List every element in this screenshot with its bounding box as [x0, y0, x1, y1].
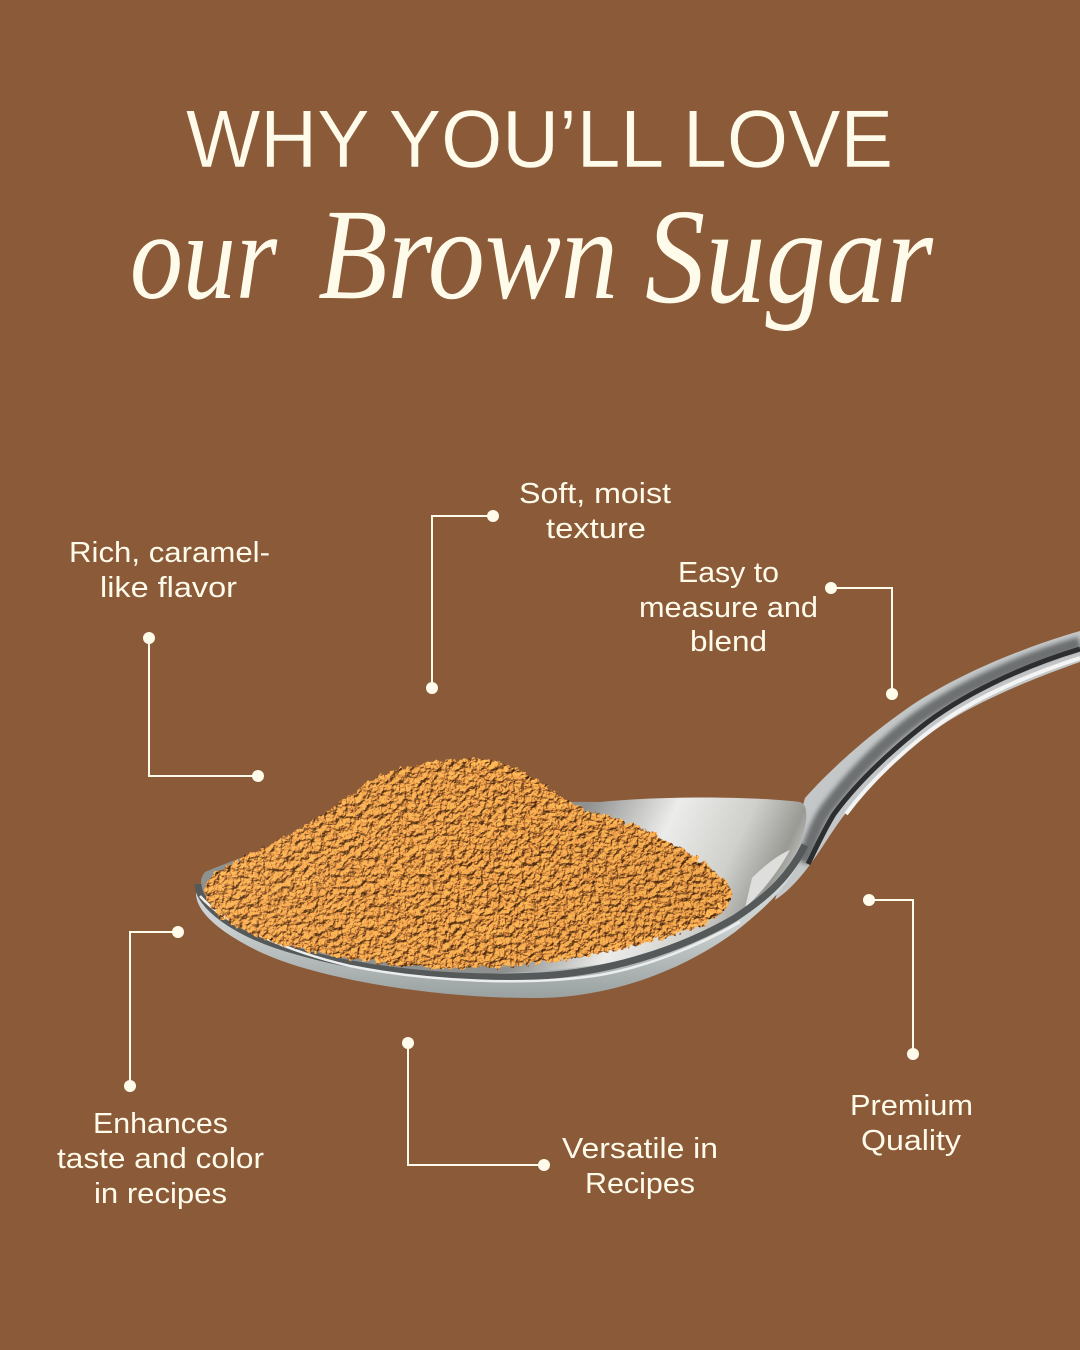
- heading: why you'll love: WHY YOU’LL LOVE: [186, 94, 893, 185]
- callout: soft, moist texture: texture: [546, 513, 646, 545]
- heading: our brown sugar: Sugar: [645, 182, 934, 332]
- spoon rim highlight: [200, 896, 740, 981]
- brown sugar pile: [205, 759, 734, 968]
- callout: soft, moist texture: Soft, moist: [519, 478, 671, 510]
- callout: easy to measure and blend: blend: [690, 626, 767, 658]
- spoon bowl interior: [201, 798, 806, 974]
- handle dark reflection: [808, 649, 1080, 864]
- callout: enhances taste and color in recipes: [57, 926, 264, 1210]
- callout: enhances taste and color in recipes: taste and color: [57, 1143, 264, 1175]
- callout: versatile in recipes: [402, 1037, 718, 1200]
- callout: enhances taste and color in recipes: Enhances: [93, 1108, 228, 1140]
- callout: rich, caramel-like flavor: like flavor: [100, 572, 237, 604]
- heading: our brown sugar: our: [130, 188, 278, 325]
- callout: versatile in recipes: Versatile in: [562, 1133, 718, 1165]
- spoon underside: [196, 860, 800, 998]
- handle lower highlight: [846, 658, 1080, 814]
- callout: easy to measure and blend: [639, 557, 898, 700]
- title: [130, 94, 934, 332]
- callout: enhances taste and color in recipes: in recipes: [94, 1178, 227, 1210]
- spoon bowl highlight: [745, 850, 790, 908]
- spoon handle: [775, 631, 1080, 900]
- spoon rim: [198, 845, 805, 977]
- callout: premium quality: Premium: [850, 1090, 973, 1122]
- sugar shading: [209, 762, 730, 966]
- spoon with brown sugar: [196, 631, 1080, 998]
- heading: our brown sugar: [130, 182, 934, 332]
- callout: premium quality: [850, 894, 973, 1157]
- callout: rich, caramel-like flavor: [69, 537, 270, 782]
- callout: soft, moist texture: [426, 478, 671, 694]
- callout: premium quality: Quality: [861, 1125, 962, 1157]
- heading: our brown sugar: Brown: [318, 183, 618, 327]
- callout: rich, caramel-like flavor: Rich, caramel-: [69, 537, 270, 569]
- handle shading band: [802, 643, 1080, 862]
- callout: easy to measure and blend: Easy to: [678, 557, 779, 589]
- callout: versatile in recipes: Recipes: [585, 1168, 695, 1200]
- callout: easy to measure and blend: measure and: [639, 592, 818, 624]
